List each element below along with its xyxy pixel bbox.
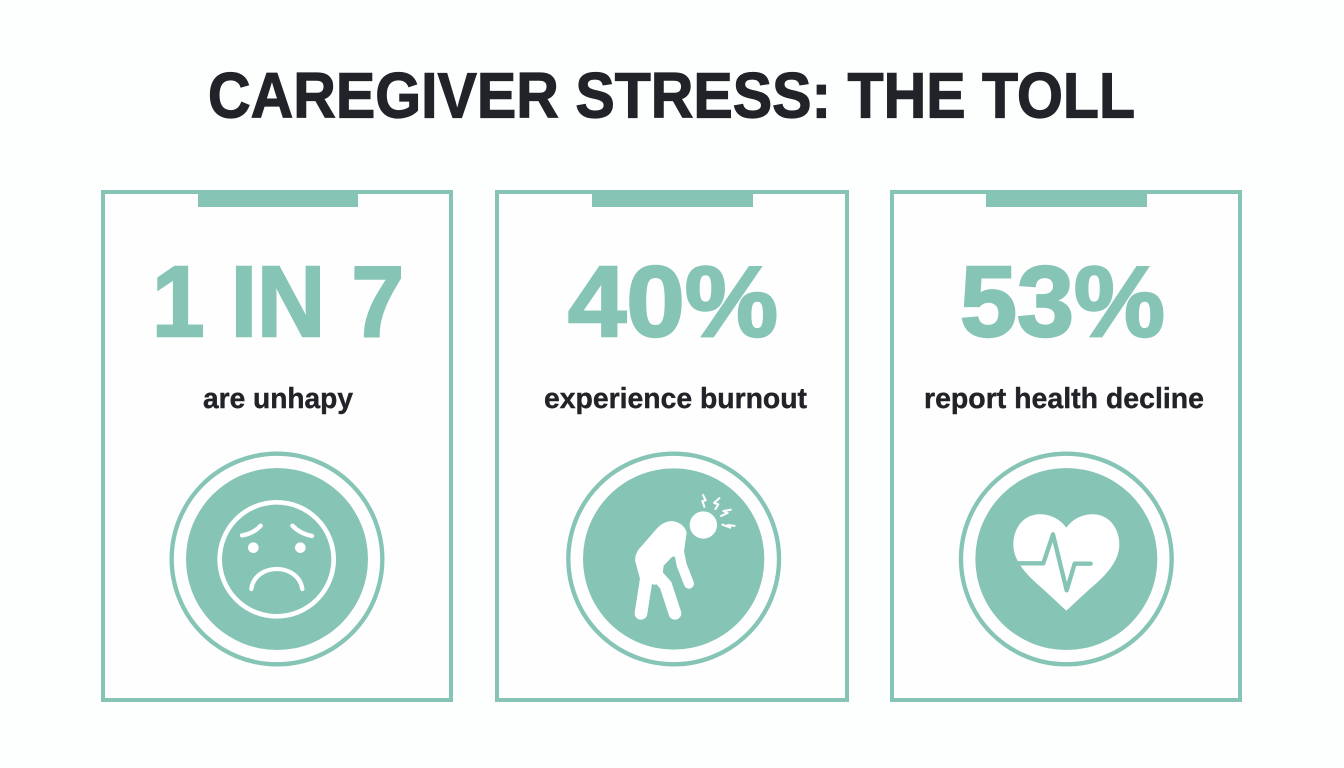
statistic: 1 in 7: 1 IN 7 [152,246,404,358]
statistic: 40%: 40% [568,246,778,358]
panel frame [892,192,1240,700]
label: are unhapy: are unhapy [203,383,353,415]
panel: 40% burnout [497,192,847,700]
title: CAREGIVER STRESS: THE TOLL [208,60,1135,132]
panel frame [103,192,451,700]
panel: 53% health decline [892,192,1240,700]
label: report health decline: report health decline [924,383,1204,415]
panel tab [986,192,1147,207]
panel tab [198,192,358,207]
label: experience burnout: experience burnout [544,383,807,415]
panel frame [497,192,847,700]
icon: sad face [172,454,382,664]
panel tab [592,192,753,207]
statistic: 53%: 53% [960,246,1165,358]
icon: exhausted person [568,454,779,664]
icon: heart with pulse [961,454,1172,664]
panel: 1 in 7 unhappy [103,192,451,700]
